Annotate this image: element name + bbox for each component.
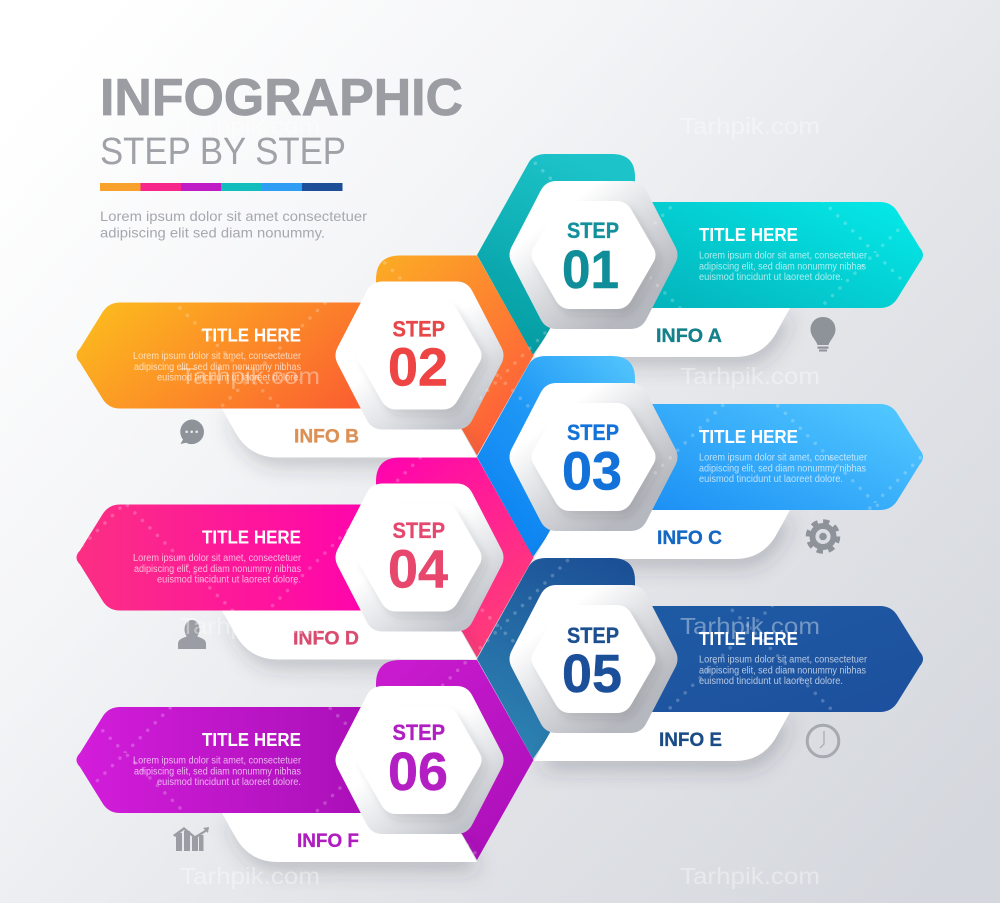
banner text: euismod tincidunt ut laoreet dolore. [699,676,843,687]
banner text [699,654,868,687]
banner [76,707,380,813]
banner title: TITLE HERE [202,326,301,346]
step label: STEP [392,720,445,745]
header block [100,69,463,240]
back band [477,154,635,355]
back band [376,660,534,860]
intro text [100,208,367,240]
step 06 module [76,660,534,862]
step label: STEP [567,420,619,445]
title: INFOGRAPHIC [100,69,463,127]
banner text: euismod tincidunt ut laoreet dolore. [699,474,843,485]
banner [640,404,923,510]
banner text: adipiscing elit, sed diam nonummy nibhas [134,564,301,575]
watermark dots [82,162,922,855]
back band [376,458,534,658]
banner [76,302,380,408]
icon: gear [808,522,838,551]
banner text: Lorem ipsum dolor sit amet, consectetuer [133,553,302,564]
banner text: euismod tincidunt ut laoreet dolore. [699,272,843,283]
banner text: euismod tincidunt ut laoreet dolore. [157,372,301,384]
banner text: adipiscing elit, sed diam nonummy nibhas [134,362,301,373]
step label: STEP [392,518,445,543]
step number: 06 [388,742,448,802]
banner text: adipiscing elit, sed diam nonummy nibhas [699,463,866,474]
back band [376,256,534,456]
info label: INFO F [297,831,359,852]
subtitle: STEP BY STEP [100,131,346,173]
hexagon [510,585,678,733]
icon: clock [807,725,839,757]
step number: 05 [562,644,622,704]
icon: growth chart [173,827,209,851]
banner text: euismod tincidunt ut laoreet dolore. [157,777,301,788]
intro text: adipiscing elit sed diam nonummy. [100,224,325,240]
watermark text [180,113,820,889]
step 05 module [477,558,923,761]
step number: 03 [562,442,622,502]
info tab [534,510,790,559]
watermark text: Tarhpik.com [680,363,820,389]
banner [76,504,380,610]
banner text: adipiscing elit, sed diam nonummy nibhas [699,665,866,676]
banner [640,202,923,308]
step 03 module [477,356,923,559]
icon: light bulb [810,317,836,352]
info label: INFO C [657,528,722,549]
info tab [222,610,477,660]
banner title: TITLE HERE [699,225,798,245]
banner title: TITLE HERE [202,730,301,750]
info label: INFO E [659,730,722,751]
step 02 module [76,256,534,458]
step number: 04 [388,540,448,600]
info label: INFO D [293,628,359,650]
banner title: TITLE HERE [202,528,301,548]
banner text: Lorem ipsum dolor sit amet, consectetuer [699,452,868,464]
back band [477,356,635,557]
banner [640,606,923,712]
banner text: adipiscing elit, sed diam nonummy nibhas [134,766,301,777]
watermark text: Tarhpik.com [680,113,820,139]
banner text [133,553,302,586]
icon: person [178,620,206,649]
banner text: adipiscing elit, sed diam nonummy nibhas [699,261,866,272]
hexagon [510,383,678,531]
banner text [699,250,868,283]
step number: 02 [388,338,448,398]
banner title: TITLE HERE [699,629,798,649]
watermark text: Tarhpik.com [680,613,820,639]
hexagon [336,484,504,632]
colour bar [100,183,342,191]
banner text: Lorem ipsum dolor sit amet, consectetuer [133,756,302,766]
icon: chat bubble [180,420,204,444]
banner text: Lorem ipsum dolor sit amet, consectetuer [699,250,868,262]
hexagon [510,181,678,329]
banner text: Lorem ipsum dolor sit amet, consectetuer [699,654,868,666]
step 04 module [76,458,534,660]
info label: INFO A [656,326,722,347]
watermark text: Tarhpik.com [180,363,320,389]
banner text: Lorem ipsum dolor sit amet, consectetuer [133,351,302,362]
banner text: euismod tincidunt ut laoreet dolore. [157,574,301,586]
banner title: TITLE HERE [699,427,798,447]
info tab [222,408,477,458]
banner text [133,756,302,788]
step label: STEP [567,218,619,243]
back band [477,558,635,759]
step label: STEP [392,316,445,342]
info tab [534,712,790,761]
watermark text: Tarhpik.com [180,613,320,639]
intro text: Lorem ipsum dolor sit amet consectetuer [100,208,367,224]
banner text [133,351,302,384]
watermark text: Tarhpik.com [180,113,320,139]
info tab [222,813,477,862]
hexagon [336,686,504,834]
info label: INFO B [294,426,359,448]
step 01 module [477,154,923,357]
hexagon [336,282,504,430]
step number: 01 [562,240,619,300]
step label: STEP [567,623,619,648]
info tab [534,308,790,357]
watermark text: Tarhpik.com [180,863,320,889]
banner text [699,452,868,485]
watermark text: Tarhpik.com [680,863,820,889]
